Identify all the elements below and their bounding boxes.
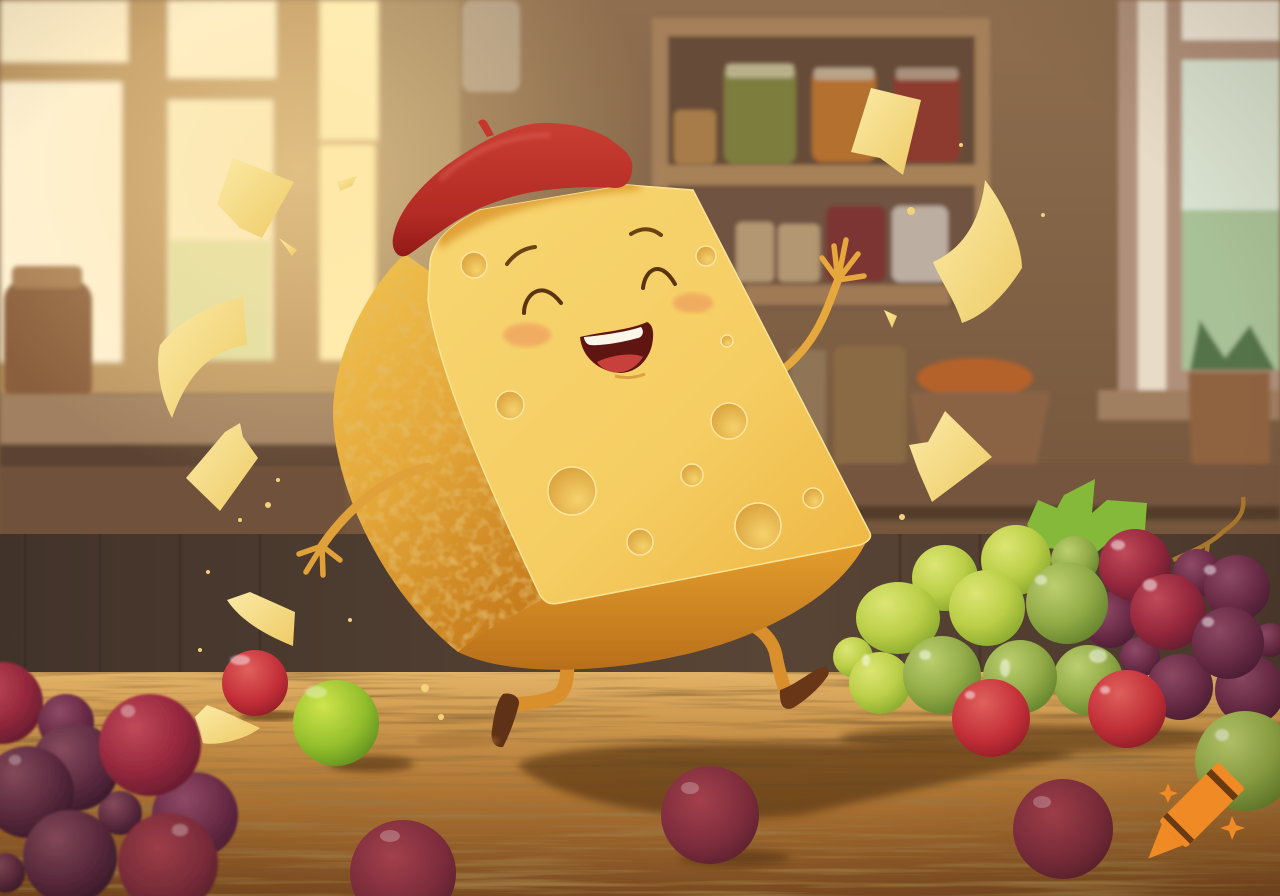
grape pile bottom left <box>0 662 238 896</box>
red grapes by cluster <box>952 670 1166 757</box>
crumbs <box>198 143 1045 720</box>
cheese body <box>333 178 871 670</box>
wainscot panelling <box>0 534 1280 674</box>
green grape at right edge <box>1195 711 1280 811</box>
eyes <box>524 290 561 313</box>
beret shadow on face <box>430 178 640 250</box>
grape cluster shadow <box>840 724 1220 752</box>
front face <box>428 185 871 604</box>
right arm <box>780 240 864 372</box>
holes <box>461 246 823 555</box>
counter <box>0 464 1280 536</box>
cheese flakes <box>158 88 1022 744</box>
green grapes in cluster <box>833 525 1123 715</box>
left arm <box>299 467 428 575</box>
jar on window sill <box>4 266 92 406</box>
beret <box>393 120 632 256</box>
wooden table <box>0 672 1280 896</box>
basket of fruit <box>910 358 1050 468</box>
legs and shoes <box>491 620 829 747</box>
hanging jug <box>462 0 520 92</box>
right window <box>1098 0 1280 472</box>
purple grapes in cluster <box>1082 529 1280 725</box>
mouth <box>580 322 653 373</box>
grape cluster: leaf <box>1027 479 1147 552</box>
cheese shadow on table <box>517 742 1076 818</box>
grape highlights <box>862 540 1229 741</box>
window sill <box>0 394 345 468</box>
grape stem <box>1173 497 1243 577</box>
rind side <box>333 254 560 652</box>
shelf unit <box>652 18 990 466</box>
underside <box>458 533 870 670</box>
crumb pile on table <box>416 734 500 748</box>
loose grapes on table <box>350 766 1113 896</box>
window light glow <box>0 0 660 490</box>
left window <box>0 0 460 400</box>
small grapes on table, left <box>222 650 414 772</box>
cheese face <box>503 229 713 378</box>
eyebrows <box>507 247 535 264</box>
crayon logo <box>1135 762 1245 872</box>
cheeks <box>503 323 551 347</box>
kitchen wall <box>0 0 1280 680</box>
